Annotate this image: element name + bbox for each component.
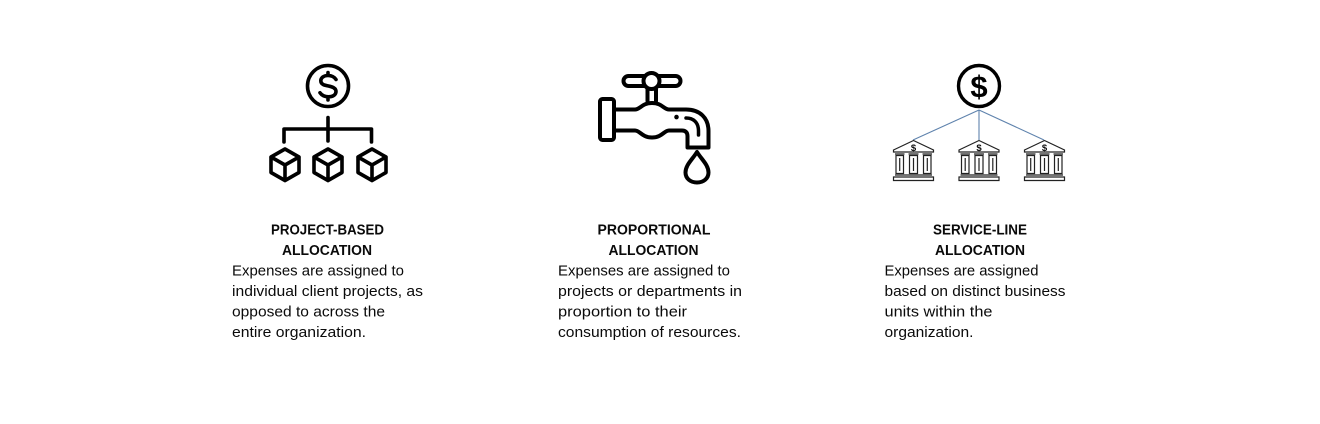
text: project-based description: Expenses are assigned to <box>232 262 404 280</box>
text: project-based description: opposed to across the <box>232 304 385 320</box>
bank dollar signs: $ <box>1042 143 1048 154</box>
text: proportional description: projects or departments in <box>558 283 742 300</box>
panel: service-line allocation <box>884 66 1066 341</box>
icon: dollar coin <box>958 66 1000 106</box>
heading: proportional allocation: ALLOCATION <box>608 243 698 259</box>
text: service-line description: Expenses are assigned <box>884 262 1038 280</box>
bank dollar signs: $ <box>976 143 982 154</box>
text: project-based description: entire organization. <box>232 324 366 341</box>
text: proportional description: Expenses are assigned to <box>558 262 730 280</box>
text: proportional description: consumption of resources. <box>558 324 741 341</box>
icon: dripping faucet <box>600 73 708 182</box>
text: proportional description: proportion to their <box>558 304 687 320</box>
text: service-line description: organization. <box>884 324 974 341</box>
connector lines <box>913 110 1044 140</box>
icon: dollar coin: $ <box>970 69 988 104</box>
panel: proportional allocation <box>558 73 742 341</box>
icon: dollar hierarchy with cubes <box>271 66 386 180</box>
text: service-line description: units within the <box>884 304 992 320</box>
bank dollar signs: $ <box>911 143 917 154</box>
text: project-based description: individual client projects, as <box>232 283 423 300</box>
heading: proportional allocation: PROPORTIONAL <box>598 222 711 238</box>
panel: project-based allocation <box>232 66 423 341</box>
icon: dollar linked to three banks <box>894 66 1064 180</box>
icon: banks <box>894 140 1064 180</box>
text: service-line description: based on distinct business <box>884 283 1066 300</box>
heading: project-based allocation: ALLOCATION <box>282 243 372 259</box>
bank dollar signs <box>911 143 1048 154</box>
heading: project-based allocation: PROJECT-BASED <box>271 222 384 238</box>
heading: service-line allocation: SERVICE-LINE <box>933 222 1027 238</box>
heading: service-line allocation: ALLOCATION <box>935 243 1025 259</box>
